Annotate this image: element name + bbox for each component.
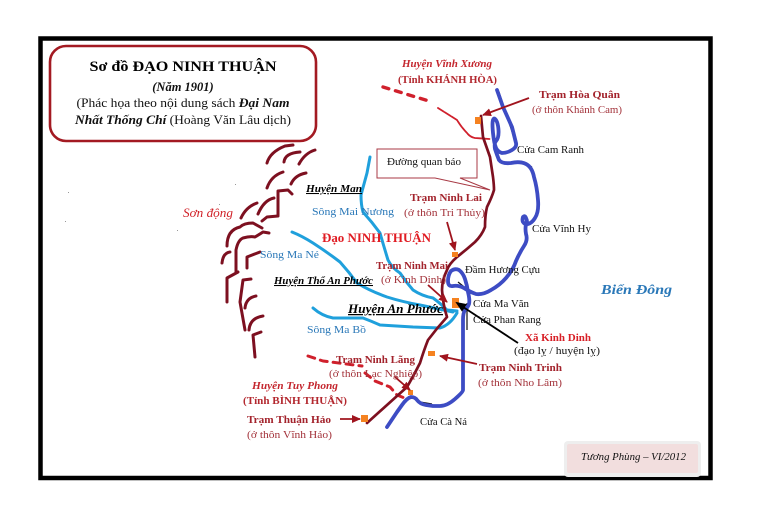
- label: Sông Ma Bồ: Sông Ma Bồ: [307, 325, 366, 336]
- label: Huyện An Phước: Huyện An Phước: [347, 302, 443, 316]
- callout: Đường quan báo: Đường quan báo: [387, 157, 461, 168]
- arrow: Xã Kinh Dinh: [457, 303, 518, 343]
- label: Sông Ma Né: Sông Ma Né: [260, 250, 319, 261]
- label: Huyện Tuy Phong: Huyện Tuy Phong: [251, 381, 338, 392]
- station markers: [361, 117, 481, 422]
- label: Cửa Ma Văn: Cửa Ma Văn: [473, 299, 530, 310]
- label: Trạm Thuận Hảo: Trạm Thuận Hảo: [247, 415, 331, 426]
- label: Vĩnh Xương: Huyện Vĩnh Xương: [401, 59, 492, 70]
- mountains: [222, 145, 315, 357]
- boundary dashes south: [308, 356, 407, 399]
- label: Biển Đông: Biển Đông: [600, 283, 672, 298]
- label: Đầm Hương Cựu: Đầm Hương Cựu: [465, 265, 541, 276]
- boundary dashes north: [383, 87, 490, 139]
- subtitle line 1: (Phác họa theo nội dung sách Đại Nam: [76, 96, 290, 110]
- label: thôn Nho Lâm: (ở thôn Nho Lâm): [478, 378, 563, 389]
- road: [367, 116, 494, 423]
- coast: [387, 90, 538, 427]
- label: thôn Vĩnh Hảo: (ở thôn Vĩnh Hảo): [247, 430, 333, 441]
- map frame: [40, 38, 710, 478]
- label: Cửa Phan Rang: Cửa Phan Rang: [473, 315, 542, 326]
- label: Sơn động: Sơn động: [183, 206, 233, 220]
- label: Bình Thuận: (Tỉnh BÌNH THUẬN): [243, 394, 348, 407]
- label: Kinh Dinh: (ở Kinh Dinh): [381, 275, 447, 286]
- label: Đạo Ninh Thuận: Đạo NINH THUẬN: [322, 231, 431, 245]
- label: Trạm Ninh Trinh: Trạm Ninh Trinh: [479, 363, 562, 374]
- credit box: Tương Phùng – VI/2012: [581, 452, 687, 463]
- label: Huyện Man: Huyện Man: [305, 184, 362, 195]
- specks: [65, 184, 236, 231]
- label: Trạm Ninh Lãng: Trạm Ninh Lãng: [336, 355, 416, 366]
- label: Huyện Thổ An Phước: Huyện Thổ An Phước: [273, 276, 373, 287]
- subtitle line 2: Nhất Thống Chí (Hoàng Văn Lâu dịch): [74, 113, 291, 127]
- title: Sơ đồ ĐẠO NINH THUẬN: [90, 58, 277, 75]
- label: Cửa Cam Ranh: Cửa Cam Ranh: [517, 145, 585, 156]
- label: Trạm Ninh Mai: Trạm Ninh Mai: [376, 261, 448, 272]
- coast under-shadow: [392, 92, 532, 420]
- label: Cửa Cà Ná: Cửa Cà Ná: [420, 417, 467, 428]
- label: Sông Mai Nương: Sông Mai Nương: [312, 207, 395, 218]
- label: Khánh Hòa: (Tỉnh KHÁNH HÒA): [398, 74, 498, 86]
- label: Trạm Ninh Lai: Trạm Ninh Lai: [410, 193, 482, 204]
- callout: Đường quan báo: [377, 149, 490, 190]
- label: đạo lỵ: (đạo lỵ / huyện lỵ): [514, 346, 601, 357]
- title box: [50, 46, 316, 141]
- label: thôn Lạc Nghiệp: (ở thôn Lạc Nghiệp): [329, 369, 423, 380]
- credit box: [564, 441, 701, 477]
- rivers: [292, 157, 457, 328]
- label: thôn Khánh Cam: (ở thôn Khánh Cam): [532, 105, 623, 116]
- label: thôn Tri Thủy: (ở thôn Tri Thủy): [404, 208, 486, 219]
- year: (Năm 1901): [152, 80, 214, 94]
- arrows: [340, 98, 529, 419]
- label: Xã Kinh Dinh: Xã Kinh Dinh: [525, 333, 591, 344]
- label: Cửa Vĩnh Hy: Cửa Vĩnh Hy: [532, 224, 592, 235]
- label: Trạm Hòa Quân: Trạm Hòa Quân: [539, 90, 620, 101]
